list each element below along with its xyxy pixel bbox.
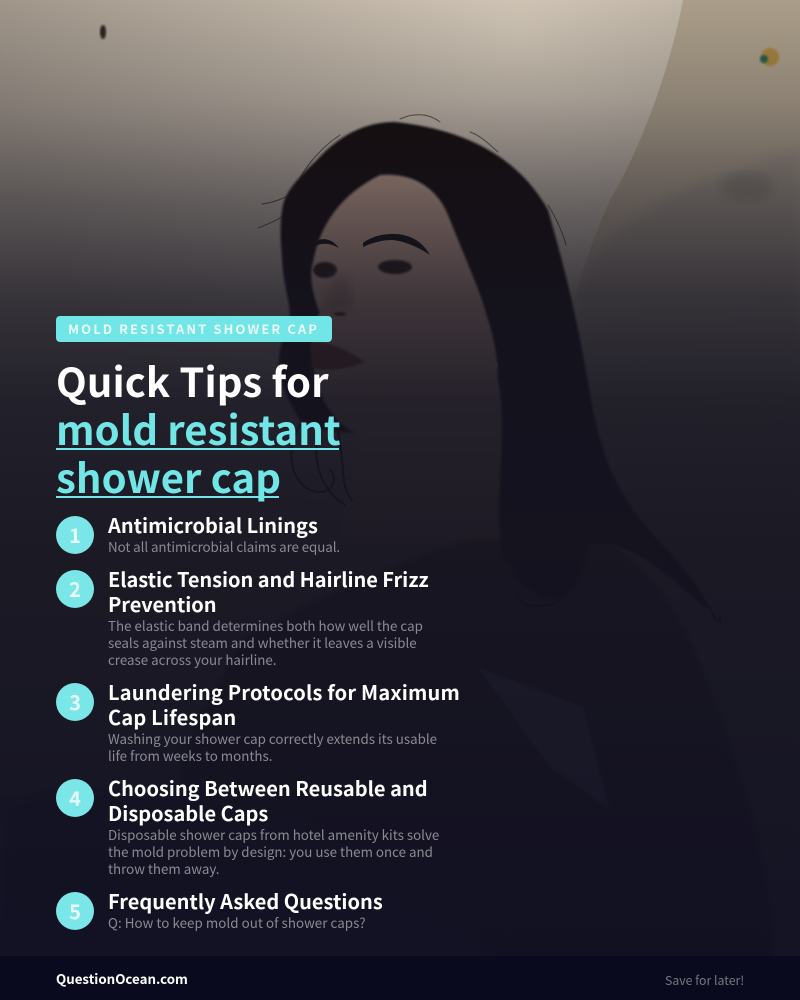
tip 1: Not all antimicrobial claims are equal. <box>108 537 340 556</box>
loose hair strands <box>258 115 720 621</box>
tip 4: the mold problem by design: you use them once and <box>108 842 433 861</box>
tip 2: seals against steam and whether it leaves a visible <box>108 633 417 652</box>
site name: QuestionOcean.com <box>56 969 188 988</box>
tip 4: Disposable shower caps from hotel amenity kits solve <box>108 825 439 844</box>
tip 4 <box>56 773 439 878</box>
tip 4: throw them away. <box>108 859 220 878</box>
tip 3: Laundering Protocols for Maximum <box>108 677 460 706</box>
title: mold resistant <box>56 399 341 457</box>
tip 1: 1 <box>69 520 81 549</box>
title: Quick Tips for <box>56 351 329 409</box>
tip 2: 2 <box>69 574 81 603</box>
save prompt: Save for later! <box>665 971 744 989</box>
tip 5: Frequently Asked Questions <box>108 886 383 915</box>
category tag: MOLD RESISTANT SHOWER CAP <box>68 319 319 338</box>
title <box>56 351 341 505</box>
face and neck <box>308 172 510 540</box>
tip 4: Disposable Caps <box>108 798 268 827</box>
category tag <box>56 316 332 342</box>
tip 3: Washing your shower cap correctly extends its usable <box>108 729 437 748</box>
tip 2: The elastic band determines both how well the cap <box>108 616 423 635</box>
tip 2: crease across your hairline. <box>108 650 276 669</box>
tip 3: 3 <box>69 687 81 716</box>
tip 5: Q: How to keep mold out of shower caps? <box>108 913 366 932</box>
tip 3: Cap Lifespan <box>108 702 236 731</box>
tip 4: Choosing Between Reusable and <box>108 773 428 802</box>
tip 2: Elastic Tension and Hairline Frizz <box>108 564 429 593</box>
tip 1 <box>56 510 340 556</box>
title: shower cap <box>56 447 281 505</box>
tip 4: 4 <box>69 783 81 812</box>
tip 3: life from weeks to months. <box>108 746 272 765</box>
tip 5: 5 <box>69 896 81 925</box>
body <box>180 528 775 960</box>
footer bar <box>0 956 800 1000</box>
towel <box>478 668 610 810</box>
face details <box>313 234 430 255</box>
tip 2 <box>56 564 429 669</box>
tip 2: Prevention <box>108 589 217 618</box>
tip 1: Antimicrobial Linings <box>108 510 318 539</box>
tip 5 <box>56 886 383 932</box>
hair <box>279 122 708 610</box>
tip 3 <box>56 677 460 765</box>
